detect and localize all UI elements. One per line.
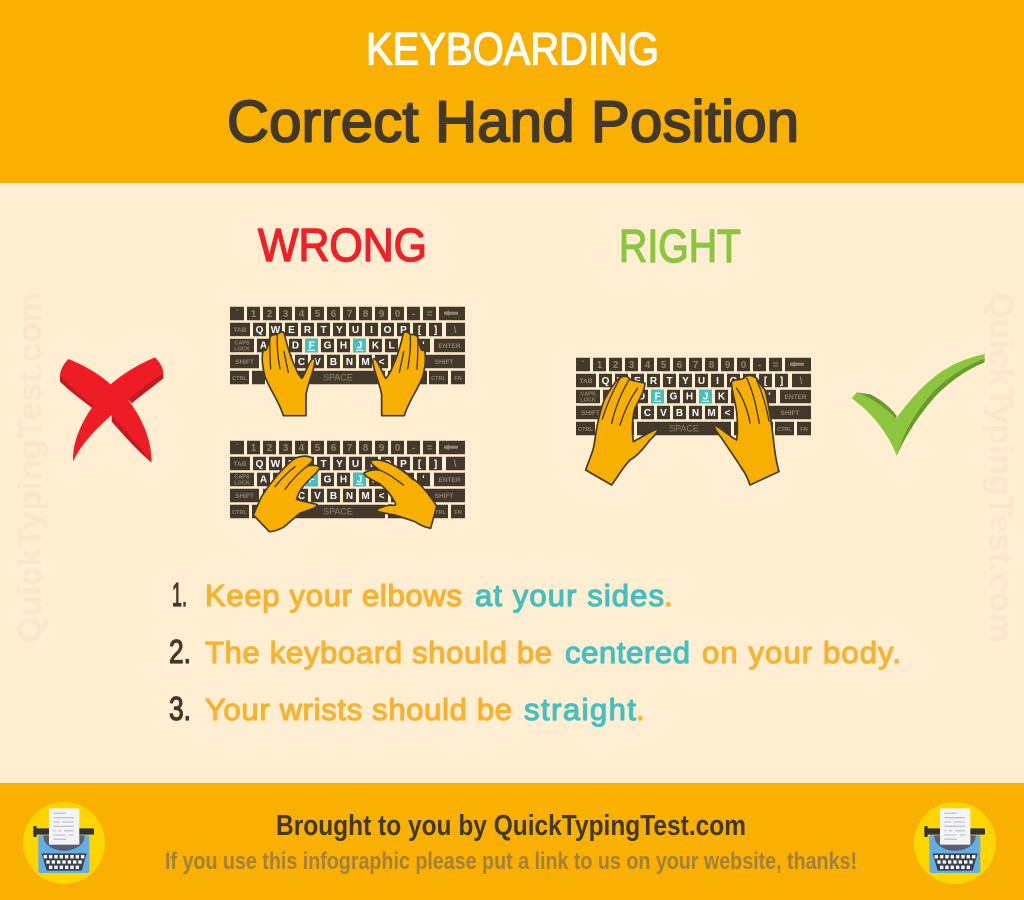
keys: ASDFGHJKL;' [260,475,425,486]
icon: green check [852,354,985,456]
tip 1: Keep your elbows [205,578,462,613]
keys: LOCK [234,481,250,487]
footer credit: Brought to you by QuickTypingTest.com [276,810,746,842]
keys: CTRL [431,510,446,516]
keys: QWERTYUIOP[] [602,376,783,387]
keyboard: wrong, wrists bent [230,441,465,532]
keyboard: right position [576,358,811,485]
keys: CAPS [234,475,250,481]
tip 2: on your body. [702,635,901,670]
icon: typewriter right [914,802,996,884]
keys: SHIFT [435,359,453,366]
tip 3: straight [524,692,636,727]
hand: left [586,376,658,485]
hand: right [714,375,779,485]
keys: CTRL [431,376,446,382]
tip 3: . [636,692,645,727]
keys: SHIFT [435,493,453,500]
keys: TAB [580,378,593,385]
keys: ASDFGHJKL;' [606,392,771,403]
keys: ZXCVBNM<>? [266,357,417,368]
keys: CTRL [777,427,792,433]
tip 1: . [664,578,673,613]
keys [576,358,811,435]
hand: right [364,460,437,528]
list: tips [169,576,901,727]
keys: SHIFT [235,493,254,500]
keys: QWERTYUIOP[] [256,459,437,470]
keys: `1234567890-= [235,443,433,454]
keys: ZXCVBNM<>? [266,491,417,502]
keys: \ [800,376,803,387]
keys: `1234567890-= [235,309,433,320]
keys: CTRL [232,510,247,516]
footer note: If you use this infographic please put a link to us on your website, thanks! [165,848,857,875]
keys: SHIFT [581,410,600,417]
tip 2: The keyboard should be [205,635,552,670]
keys: SPACE [323,507,353,517]
keys: \ [454,325,457,336]
keys: SHIFT [235,359,254,366]
tip 3: 3. [169,690,191,727]
keys: CAPS [234,341,250,347]
tip 2 [169,633,901,670]
keys: `1234567890-= [581,360,779,371]
keys: \ [454,459,457,470]
header band [0,0,1024,183]
title: keyboarding: KEYBOARDING [366,24,659,74]
keys: ASDFGHJKL;' [260,341,425,352]
keys: TAB [234,327,247,334]
keys: FN [800,427,808,433]
hand: left [262,332,315,416]
keys: SPACE [669,424,699,434]
tip 3: Your wrists should be [205,692,512,727]
watermark right: QuickTypingTest.com [983,292,1020,643]
keys: CTRL [578,427,593,433]
keys: LOCK [234,347,250,353]
keys: TAB [234,461,247,468]
tip 2: 2. [169,633,191,670]
keys: ENTER [784,394,807,401]
heading: wrong: WRONG [258,219,427,271]
keys [230,307,465,384]
tip 2: centered [565,635,690,670]
tip 1: at your sides [475,578,664,613]
keys: SHIFT [781,410,799,417]
footer band [0,783,1024,900]
keys: ZXCVBNM<>? [612,408,763,419]
keys: LOCK [580,398,596,404]
hand: right [373,332,425,416]
keys [230,441,465,518]
watermark left: QuickTypingTest.com [11,292,48,643]
tip 3 [169,690,645,727]
keys: ENTER [438,343,461,350]
keys: FN [454,376,462,382]
keys: QWERTYUIOP[] [256,325,437,336]
hand: left [253,456,320,532]
tip 1 [172,576,673,613]
keys: CTRL [232,376,247,382]
title: correct hand position: Correct Hand Position [227,90,799,154]
keys: ENTER [438,477,461,484]
keys: SPACE [323,373,353,383]
keys: CAPS [580,392,596,398]
tip 1: 1. [172,576,187,613]
icon: typewriter left [23,802,105,884]
keys: FN [454,510,462,516]
heading: right: RIGHT [619,220,741,272]
keyboard: wrong, hands apart [230,307,465,416]
icon: red cross [60,357,163,463]
